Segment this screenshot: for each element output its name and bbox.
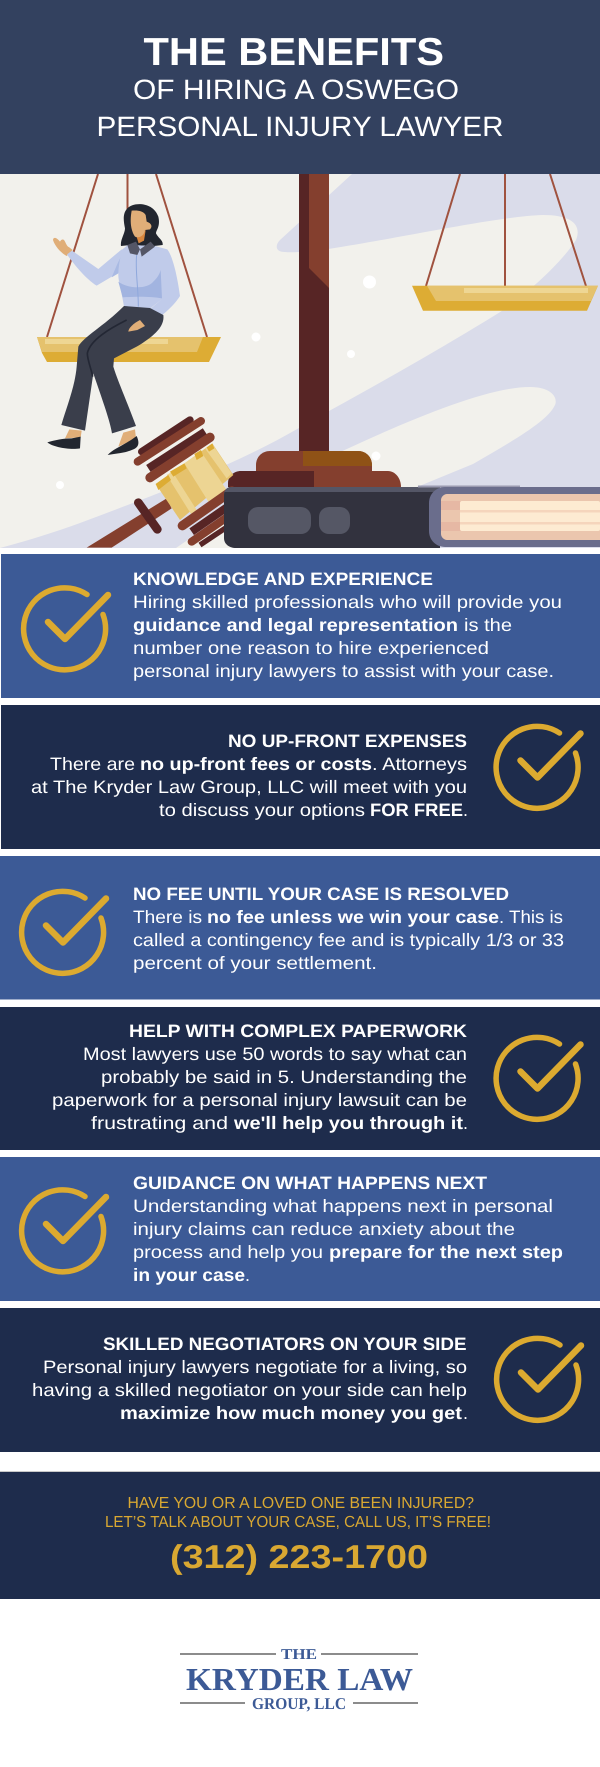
body text: at The Kryder Law Group, LLC will meet with you	[31, 777, 467, 797]
body text: personal injury lawyers to assist with your case.	[133, 661, 554, 681]
body text: percent of your settlement.	[133, 953, 377, 973]
body text: number one reason to hire experienced	[133, 638, 489, 658]
phone number: (312) 223-1700	[170, 1538, 428, 1575]
black gavel block	[224, 487, 440, 548]
body text: frustrating and	[91, 1113, 228, 1133]
body text: . Attorneys	[372, 754, 467, 774]
icon: gold check mark	[497, 1338, 581, 1420]
body text: called a contingency fee and is typically 1/3 or 33	[133, 930, 564, 950]
subtitle: PERSONAL INJURY LAWYER	[96, 111, 504, 142]
body text: There are	[50, 754, 135, 774]
panel: no up-front expenses	[1, 705, 600, 849]
body text: maximize how much money you get	[120, 1403, 462, 1423]
icon: gold check mark	[24, 588, 108, 670]
body text	[52, 1044, 468, 1133]
icon: gold check mark	[496, 726, 580, 808]
body text: prepare for the next step	[329, 1242, 563, 1262]
body text: Hiring skilled professionals who will provide you	[133, 592, 562, 612]
panel: skilled negotiators on your side	[0, 1308, 600, 1452]
right scale pan	[412, 174, 598, 311]
body text: paperwork for a personal injury lawsuit can be	[52, 1090, 467, 1110]
body text	[133, 907, 564, 973]
call to action text: LET’S TALK ABOUT YOUR CASE, CALL US, IT’S FREE!	[105, 1514, 491, 1531]
body text: we'll help you through it	[233, 1113, 463, 1133]
body text: guidance and legal representation	[133, 615, 458, 635]
call to action banner	[0, 1471, 600, 1599]
call to action text	[105, 1495, 491, 1531]
body text	[32, 1357, 468, 1423]
sparkle dots	[56, 276, 380, 489]
heading: SKILLED NEGOTIATORS ON YOUR SIDE	[103, 1334, 466, 1354]
logo: The Kryder Law Group, LLC	[180, 1647, 418, 1713]
body text: Understanding what happens next in personal	[133, 1196, 553, 1216]
icon: gold check mark	[22, 891, 106, 973]
heading: GUIDANCE ON WHAT HAPPENS NEXT	[133, 1173, 487, 1193]
heading: HELP WITH COMPLEX PAPERWORK	[129, 1021, 467, 1041]
panel: guidance on what happens next	[0, 1157, 600, 1301]
body text: in your case	[133, 1265, 245, 1285]
logo: The Kryder Law Group, LLC: THE	[281, 1647, 317, 1663]
body text: FOR FREE	[370, 800, 463, 820]
heading: NO UP-FRONT EXPENSES	[228, 731, 467, 751]
body text: having a skilled negotiator on your side can help	[32, 1380, 467, 1400]
body text	[133, 1196, 563, 1285]
body text: is the	[464, 615, 512, 635]
gavel	[87, 420, 235, 548]
central pillar and base	[228, 174, 401, 487]
title: THE BENEFITS	[144, 31, 444, 74]
heading: KNOWLEDGE AND EXPERIENCE	[133, 569, 433, 589]
body text: .	[245, 1265, 250, 1285]
icon: gold check mark	[22, 1190, 106, 1272]
body text	[133, 592, 562, 681]
panel: no fee until your case is resolved	[0, 856, 600, 1000]
heading: NO FEE UNTIL YOUR CASE IS RESOLVED	[133, 884, 509, 904]
subtitle	[96, 74, 504, 142]
subtitle: OF HIRING A OSWEGO	[133, 74, 459, 105]
left scale pan	[37, 174, 221, 362]
header banner	[0, 0, 600, 174]
body text: process and help you	[133, 1242, 323, 1262]
body text: Personal injury lawyers negotiate for a living, so	[43, 1357, 467, 1377]
body text: There is	[133, 907, 202, 927]
body text: injury claims can reduce anxiety about the	[133, 1219, 515, 1239]
body text: no fee unless we win your case	[207, 907, 499, 927]
panel: help with complex paperwork	[0, 1007, 600, 1150]
body text: .	[463, 1403, 468, 1423]
body text: . This is	[499, 907, 563, 927]
call to action text: HAVE YOU OR A LOVED ONE BEEN INJURED?	[128, 1495, 474, 1512]
body text: .	[463, 800, 468, 820]
body text: probably be said in 5. Understanding the	[101, 1067, 467, 1087]
body text: Most lawyers use 50 words to say what can	[83, 1044, 467, 1064]
body text: .	[463, 1113, 468, 1133]
woman sitting on the scale	[47, 204, 180, 455]
logo: The Kryder Law Group, LLC: GROUP, LLC	[252, 1694, 346, 1713]
icon: gold check mark	[496, 1037, 580, 1119]
book	[418, 486, 600, 547]
body text: to discuss your options	[159, 800, 365, 820]
body text	[31, 754, 468, 820]
panel: knowledge and experience	[1, 554, 600, 698]
illustration: scales of justice with woman, gavel and book	[0, 174, 600, 548]
body text: no up-front fees or costs	[140, 754, 372, 774]
logo: The Kryder Law Group, LLC: KRYDER LAW	[186, 1661, 413, 1697]
